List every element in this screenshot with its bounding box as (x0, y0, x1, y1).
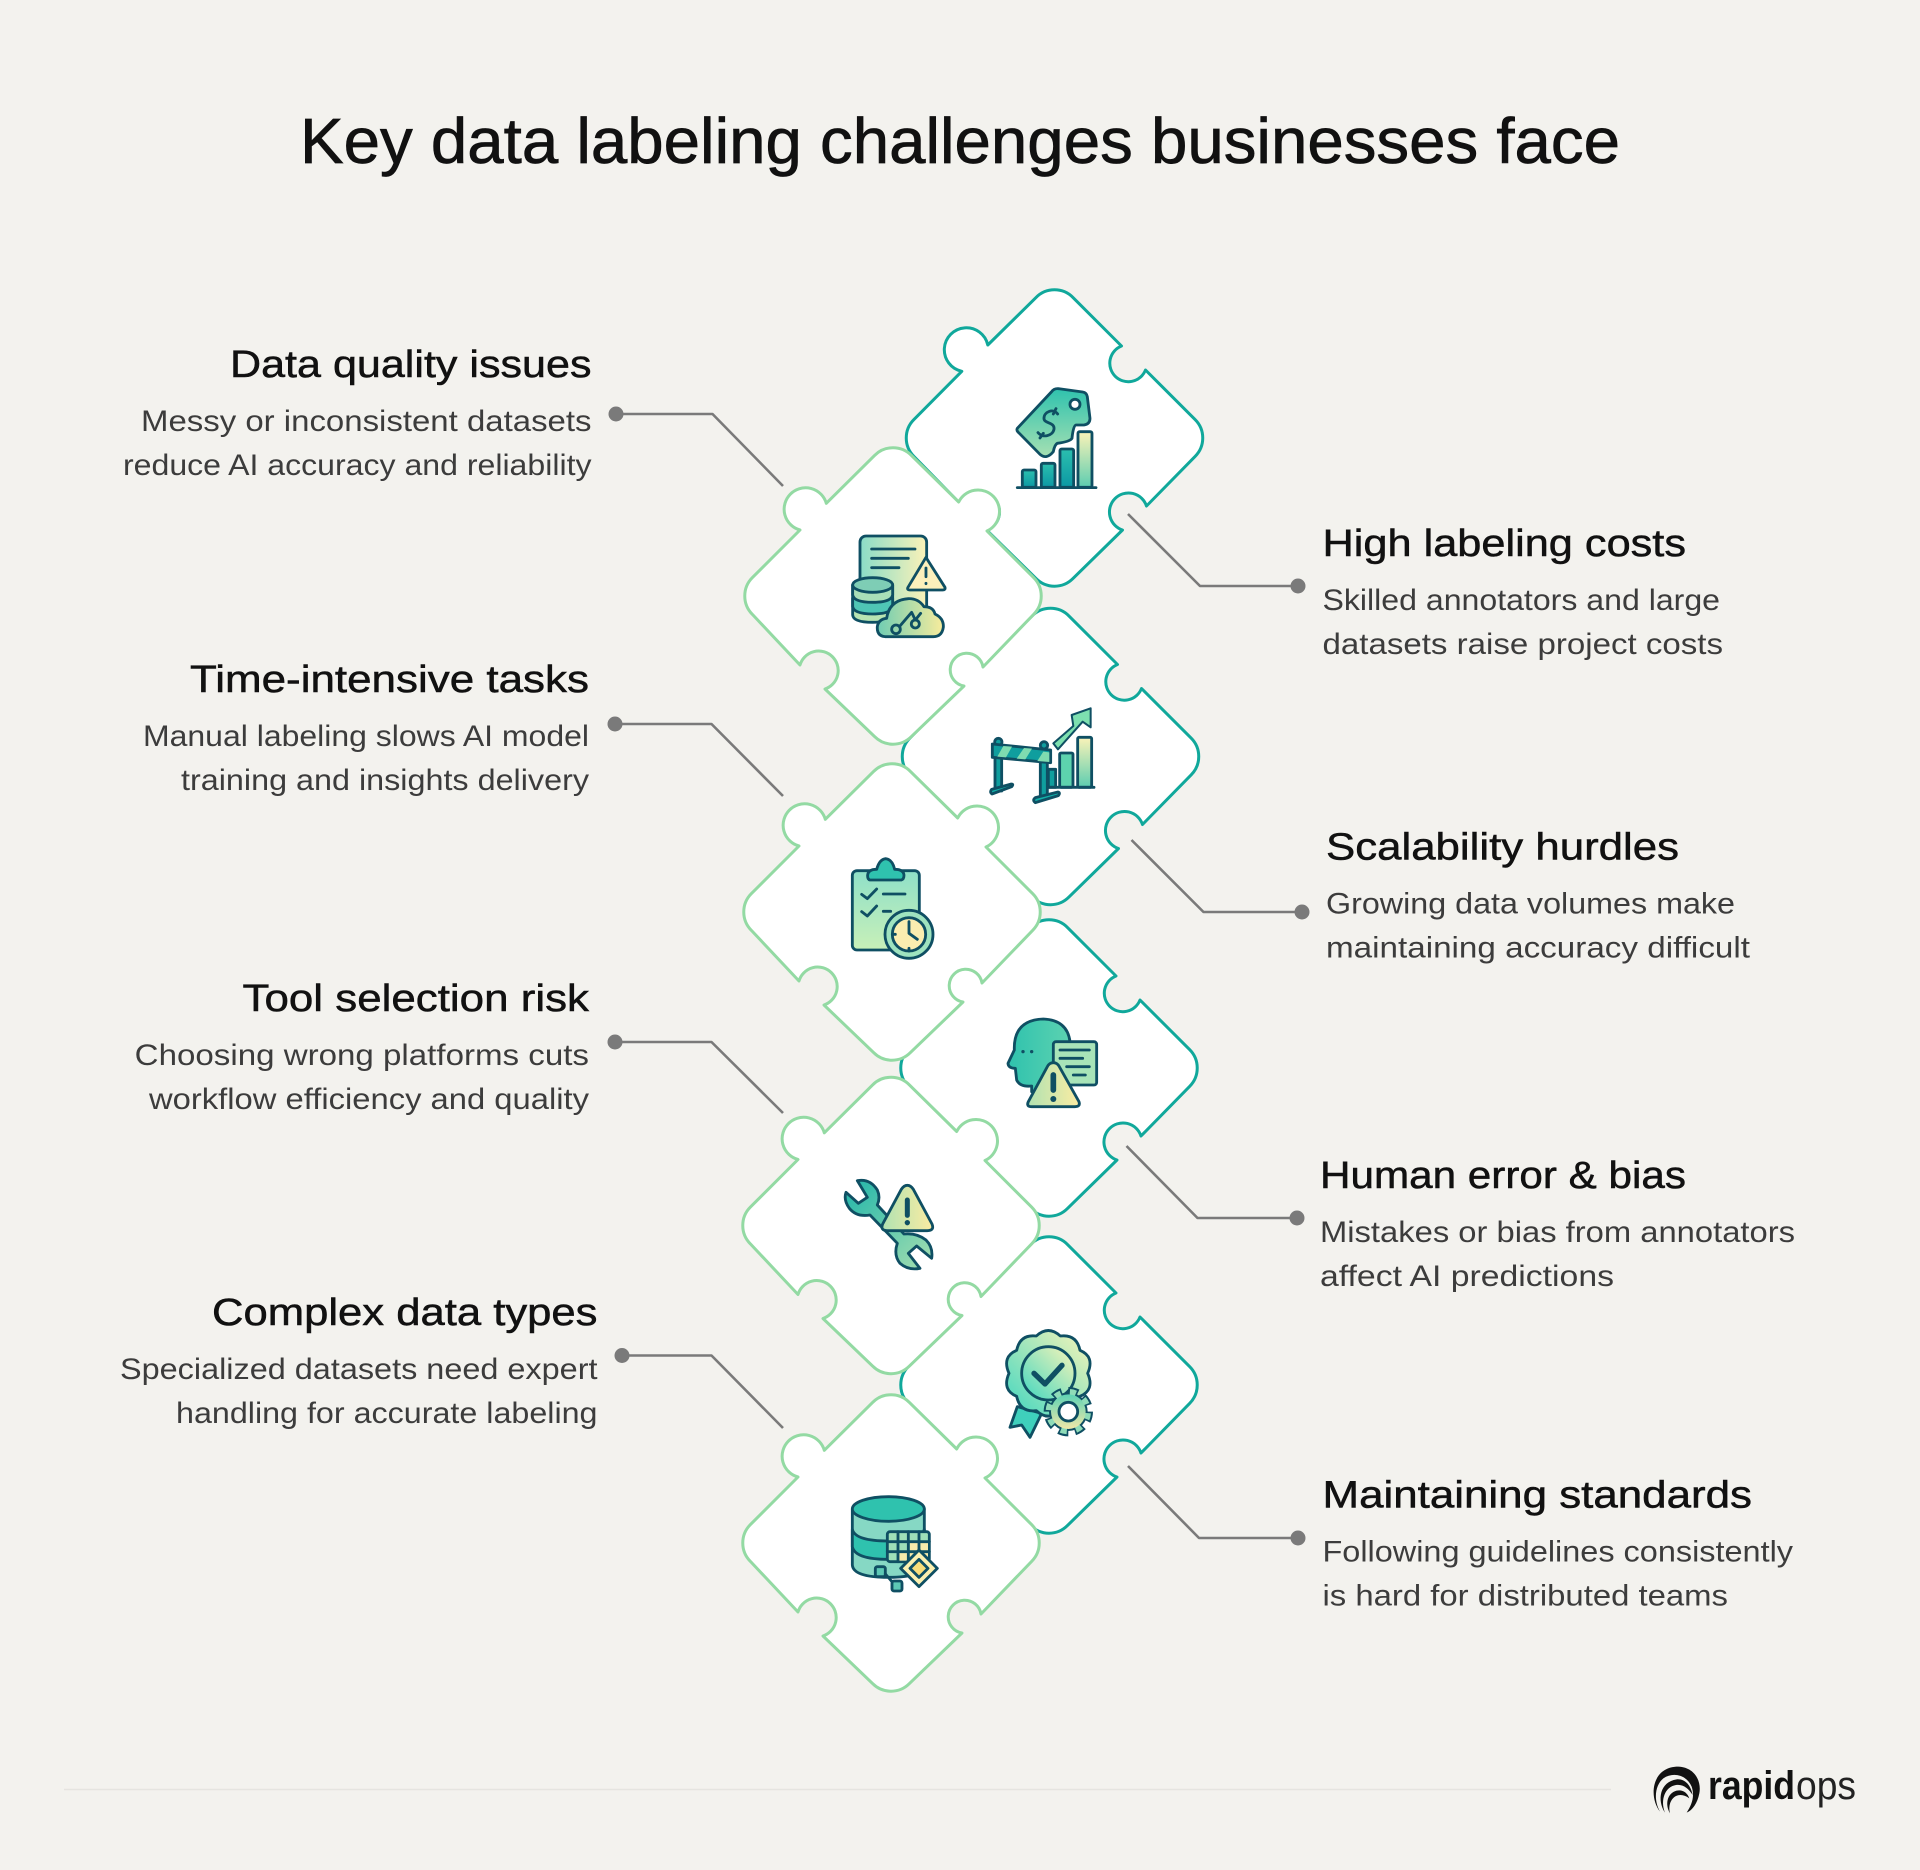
text block: tool selection risk (135, 978, 590, 1116)
logo: rapidops: rapid (1708, 1764, 1795, 1808)
panel: teal puzzle pieces (901, 290, 1203, 1533)
connector: complex data types (614, 1348, 783, 1428)
text block: complex data types: handling for accurate labeling (176, 1397, 598, 1430)
icon: head, document and warning (1008, 1019, 1097, 1107)
text block: human error and bias (1320, 1155, 1795, 1293)
connector: human error and bias (1126, 1146, 1304, 1226)
icon: wrench and warning (845, 1180, 933, 1269)
text block: maintaining standards: Maintaining standards (1322, 1474, 1752, 1516)
text block: maintaining standards: Following guidelines consistently (1322, 1536, 1793, 1568)
text block: data quality issues: Messy or inconsistent datasets (141, 405, 592, 438)
text block: time-intensive tasks: Time-intensive tasks (190, 659, 589, 701)
text block: human error and bias: affect AI predictions (1320, 1260, 1614, 1293)
text block: high labeling costs: High labeling costs (1322, 523, 1686, 565)
connector: scalability hurdles (1132, 840, 1310, 920)
text block: tool selection risk: Tool selection risk (242, 978, 590, 1020)
text block: scalability hurdles: Growing data volumes make (1326, 888, 1735, 920)
text block: tool selection risk: Choosing wrong platforms cuts (135, 1039, 589, 1072)
text block: complex data types: Specialized datasets need expert (120, 1353, 598, 1386)
text block: maintaining standards: is hard for distributed teams (1322, 1580, 1728, 1612)
text block: complex data types (120, 1292, 598, 1430)
icon: document, database, warning and cloud (853, 536, 945, 637)
text block: tool selection risk: workflow efficiency and quality (148, 1083, 589, 1116)
connector: high labeling costs (1128, 514, 1306, 594)
text block: time-intensive tasks: training and insights delivery (181, 764, 589, 797)
connector: data quality issues (608, 406, 783, 486)
text block: maintaining standards (1322, 1474, 1793, 1612)
connector: time-intensive tasks (608, 716, 783, 796)
panel: green puzzle pieces (743, 448, 1041, 1691)
icon: database with grid and chip (852, 1497, 937, 1591)
connector: tool selection risk (608, 1034, 783, 1113)
text block: time-intensive tasks: Manual labeling slows AI model (143, 720, 589, 753)
text block: data quality issues: reduce AI accuracy and reliability (123, 449, 592, 482)
footer divider (64, 1788, 1611, 1790)
text block: scalability hurdles: maintaining accuracy difficult (1326, 932, 1751, 964)
text block: scalability hurdles (1326, 826, 1751, 964)
text block: high labeling costs: Skilled annotators and large (1322, 584, 1720, 617)
text block: scalability hurdles: Scalability hurdles (1326, 826, 1679, 868)
logo: rapidops (1654, 1764, 1856, 1813)
logo: rapidops: ops (1796, 1764, 1856, 1808)
text block: human error and bias: Mistakes or bias from annotators (1320, 1216, 1795, 1249)
text block: human error and bias: Human error & bias (1320, 1155, 1686, 1197)
icon: barrier with rising chart (991, 708, 1094, 803)
text block: complex data types: Complex data types (212, 1292, 598, 1334)
icon: quality badge with gear (1007, 1330, 1090, 1437)
title: Key data labeling challenges businesses face (300, 105, 1620, 177)
text block: data quality issues: Data quality issues (230, 344, 592, 386)
text block: high labeling costs: datasets raise project costs (1322, 628, 1723, 661)
connector: maintaining standards (1128, 1466, 1306, 1546)
icon: clipboard with clock (852, 859, 933, 958)
icon: price tag with bars (1017, 389, 1096, 488)
text block: high labeling costs (1322, 523, 1723, 661)
text block: time-intensive tasks (143, 659, 589, 797)
text block: data quality issues (123, 344, 592, 482)
